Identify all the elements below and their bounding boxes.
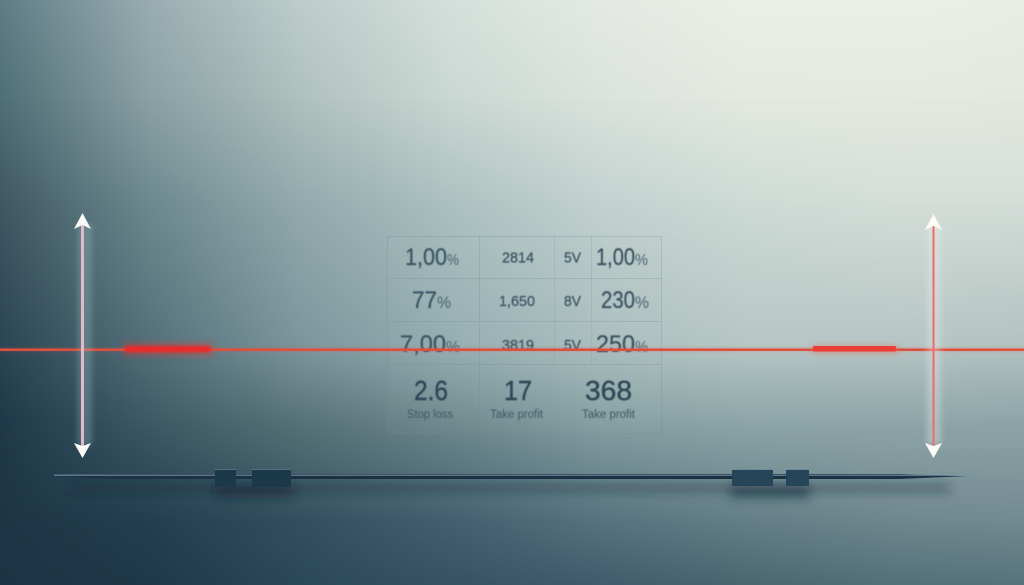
- table values: 2.6: [414, 375, 448, 406]
- table grid: [387, 236, 662, 434]
- table values: %: [446, 339, 460, 356]
- red horizontal line: [0, 347, 1024, 352]
- left blocks: [215, 469, 291, 487]
- table values: 368: [585, 375, 632, 406]
- right red marker: [812, 345, 898, 354]
- right blocks: [732, 469, 809, 486]
- table values: Take profit: [490, 409, 544, 421]
- table values: Stop loss: [407, 409, 453, 421]
- bottom rail shadow: [70, 484, 950, 499]
- table values: 250: [596, 331, 635, 358]
- table values: %: [447, 252, 459, 269]
- table values: 5V: [564, 250, 581, 266]
- right double arrow: [925, 214, 942, 458]
- table values: 230: [601, 287, 635, 314]
- left double arrow: [74, 213, 92, 458]
- table values: 1,00: [596, 244, 635, 271]
- bottom rail with blocks: [52, 469, 968, 487]
- table values: 1,00: [405, 244, 447, 271]
- table values: 17: [504, 375, 532, 406]
- table values: %: [635, 293, 649, 312]
- table values: [400, 244, 649, 421]
- data table: [387, 236, 662, 434]
- table values: %: [635, 252, 648, 269]
- table values: %: [437, 293, 451, 312]
- table values: 5V: [564, 337, 581, 354]
- table values: 2814: [502, 250, 534, 266]
- table values: Take profit: [582, 409, 636, 421]
- table values: 77: [412, 287, 437, 314]
- table values: 3819: [502, 337, 534, 354]
- table values: 7,00: [400, 331, 446, 358]
- table values: 1,650: [499, 293, 535, 310]
- table values: 8V: [564, 293, 581, 310]
- table values: %: [635, 339, 648, 356]
- left red marker: [123, 343, 213, 356]
